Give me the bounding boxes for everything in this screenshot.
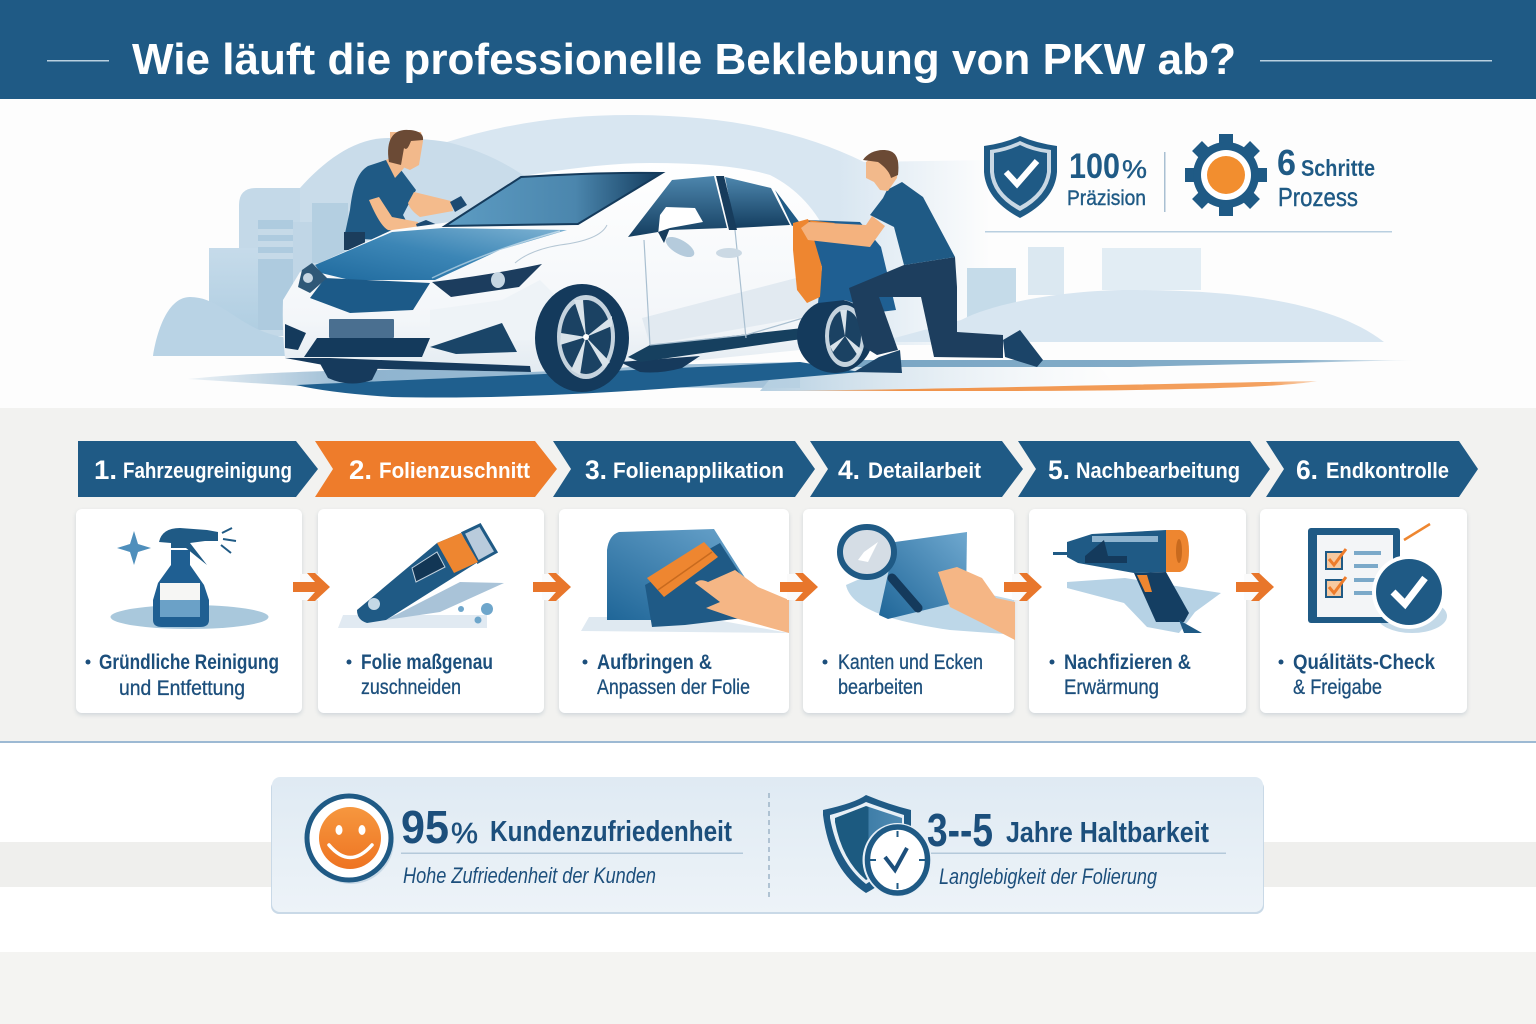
text: step 4: bearbeiten xyxy=(838,676,923,699)
front wheel xyxy=(535,284,629,392)
step 6 banner: 6. xyxy=(1296,455,1318,485)
panel: step 5 card xyxy=(1029,509,1246,713)
stat: customer satisfaction: Hohe Zufriedenheit der Kunden xyxy=(403,863,656,888)
text: step 2: zuschneiden xyxy=(361,676,461,699)
stat: 6 Schritte Prozess: Schritte xyxy=(1301,155,1375,181)
icon: shield check xyxy=(984,136,1057,218)
arrow 1 xyxy=(293,573,330,601)
side windows xyxy=(628,176,727,237)
title: Wie läuft die professionelle Beklebung von PKW ab? xyxy=(132,35,1236,84)
text: step 6: Quálitäts-Check xyxy=(1293,651,1435,674)
step 4 banner: Detailarbeit xyxy=(868,458,982,483)
shirt xyxy=(870,182,955,265)
icon: shield with clock xyxy=(823,795,932,897)
windshield xyxy=(445,173,662,226)
backdrop: hills and city skyline xyxy=(153,115,1384,356)
text: step 5: Erwärmung xyxy=(1064,676,1159,699)
step banners xyxy=(78,441,1478,497)
step 3 banner: Folienapplikation xyxy=(613,458,784,483)
stat: customer satisfaction: 95 xyxy=(401,801,449,853)
vinyl film xyxy=(805,220,896,312)
arrow 2 xyxy=(533,573,571,601)
rear wheel xyxy=(797,299,873,373)
stats top right xyxy=(984,134,1392,232)
icon: smiley xyxy=(307,796,394,884)
text: step 5: Nachfizieren & xyxy=(1064,651,1191,674)
panel: step 6 card xyxy=(1260,509,1467,713)
text: step 4 xyxy=(822,651,983,699)
stat: customer satisfaction xyxy=(401,801,743,888)
step 6 banner: Endkontrolle xyxy=(1326,458,1449,483)
text: step 2: Folie maßgenau xyxy=(361,651,493,674)
hood film xyxy=(315,228,567,280)
stat: 100% Präzision xyxy=(1067,147,1147,210)
shoes xyxy=(854,350,902,373)
icon: squeegee on film with hand xyxy=(581,529,789,633)
step 3 banner: 3. xyxy=(585,455,607,485)
stat: durability: 3--5 xyxy=(927,804,993,856)
step 5 banner: 5. xyxy=(1048,455,1070,485)
stat: durability: Langlebigkeit der Folierung xyxy=(939,864,1158,889)
step 4 banner xyxy=(810,441,1023,497)
stat: 6 Schritte Prozess: Prozess xyxy=(1278,182,1358,212)
stat: 6 Schritte Prozess xyxy=(1277,142,1375,212)
step 5 banner xyxy=(1018,441,1270,497)
hero illustration xyxy=(153,115,1415,398)
step 2 banner: Folienzuschnitt xyxy=(379,458,531,483)
text: step 3: Aufbringen & xyxy=(597,651,712,674)
arrow 3 xyxy=(780,573,818,601)
text: step 3 xyxy=(582,651,750,699)
text: step 6: & Freigabe xyxy=(1293,676,1382,699)
stat: 100% Präzision: % xyxy=(1122,156,1147,184)
ground shadows xyxy=(188,360,1415,398)
step 2 banner: 2. xyxy=(349,455,372,485)
stat: 100% Präzision: Präzision xyxy=(1067,187,1146,210)
arrow 5 xyxy=(1236,573,1274,601)
step 2 banner xyxy=(315,441,557,497)
step 4 banner: 4. xyxy=(838,455,860,485)
icon: magnifier and hand xyxy=(840,527,1015,640)
stat: durability: Jahre Haltbarkeit xyxy=(1006,817,1209,849)
text: step 4: Kanten und Ecken xyxy=(838,651,983,674)
car xyxy=(283,163,873,392)
step 1 banner xyxy=(78,441,318,497)
headlights xyxy=(432,264,542,297)
text: step 6 xyxy=(1278,651,1435,699)
number plate xyxy=(329,319,394,338)
step 1 banner: 1. xyxy=(94,455,117,485)
stat: 100% Präzision: 100 xyxy=(1069,147,1120,186)
stat: durability xyxy=(927,804,1226,889)
stat: 6 Schritte Prozess: 6 xyxy=(1277,142,1296,183)
trousers xyxy=(849,257,1003,358)
worker right with film xyxy=(793,150,1043,373)
step 5 banner: Nachbearbeitung xyxy=(1076,458,1240,483)
panel: step 1 card xyxy=(76,509,302,713)
text: step 2 xyxy=(346,651,493,699)
arm xyxy=(801,216,885,247)
panel: step 4 card xyxy=(803,509,1015,713)
panel: bottom stats xyxy=(271,777,1264,914)
icon: cutter knife xyxy=(338,525,504,628)
text: step 1: Gründliche Reinigung xyxy=(99,651,279,674)
text: step 3: Anpassen der Folie xyxy=(597,676,750,699)
panel: step 2 card xyxy=(318,509,544,713)
header banner xyxy=(0,0,1536,99)
icon: heat gun xyxy=(1053,530,1221,633)
grille xyxy=(310,278,430,313)
icon: gear xyxy=(1185,134,1267,216)
text: step 1 xyxy=(86,651,279,700)
step 6 banner xyxy=(1266,441,1478,497)
head xyxy=(866,152,898,191)
step 3 banner xyxy=(553,441,815,497)
icon: checklist with check badge xyxy=(1308,524,1447,633)
panel: step 3 card xyxy=(559,509,789,713)
car body xyxy=(283,163,840,372)
card connectors xyxy=(300,574,1262,600)
text: step 5 xyxy=(1050,651,1191,699)
step 1 banner: Fahrzeugreinigung xyxy=(123,458,292,483)
mirror xyxy=(658,207,703,243)
worker left xyxy=(344,130,467,250)
icon: spray bottle xyxy=(110,528,268,629)
air intakes xyxy=(304,338,430,357)
arrow 4 xyxy=(1004,573,1042,601)
door lines and handle xyxy=(644,230,830,345)
stat: customer satisfaction: Kundenzufriedenheit xyxy=(490,816,732,848)
text: step 1: und Entfettung xyxy=(119,677,245,700)
stat: customer satisfaction: % xyxy=(451,818,478,850)
